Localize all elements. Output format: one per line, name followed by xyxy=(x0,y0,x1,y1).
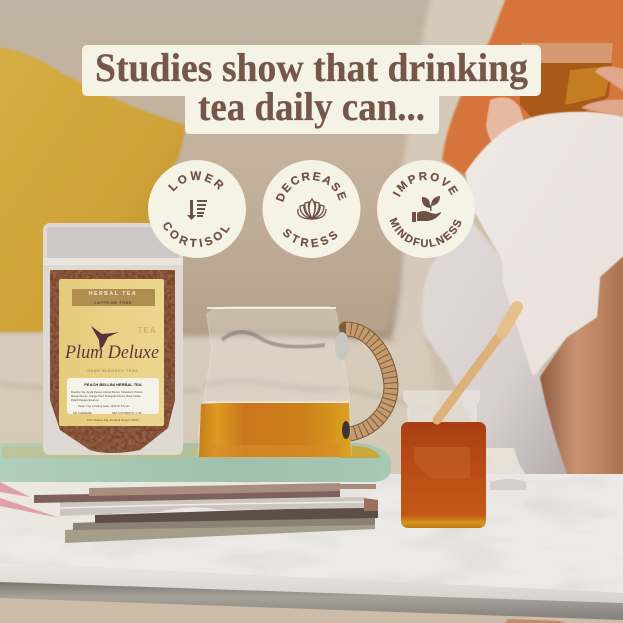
metal frame xyxy=(0,582,623,620)
line 1: Studies show that drinking xyxy=(95,45,528,90)
badge text: LOWER xyxy=(168,171,224,192)
address: Plum Deluxe Tea, Portland Oregon 97204 xyxy=(87,418,139,422)
knee and linen skirt xyxy=(465,112,623,377)
ingredients: Steep 1 tsp in boiling water, 212F for 5-6 min xyxy=(78,404,130,408)
ingredients: Rooibos Tea, Apple Pieces, Apricot Pieces, Strawberry Pieces, xyxy=(71,390,143,394)
badge: decrease stress: STRESS xyxy=(283,229,338,248)
yellow throw pillow xyxy=(0,46,185,332)
page surfaces xyxy=(0,475,364,543)
band xyxy=(72,289,155,306)
wicker handle xyxy=(346,329,391,434)
band text: HERBAL TEA xyxy=(89,291,137,297)
pouch body xyxy=(43,223,183,455)
table top xyxy=(0,474,623,593)
hand right xyxy=(581,66,623,118)
magazine 4 spine xyxy=(95,506,378,523)
net contents: NO CAFFEINE xyxy=(73,411,92,415)
lower skirt xyxy=(422,213,572,477)
brand: Plum Deluxe xyxy=(64,342,159,363)
TEA stamp: TEA xyxy=(138,326,156,335)
icon: down arrow with lines xyxy=(187,200,207,220)
icon: hand with seedling xyxy=(412,196,441,222)
magazine 5 spine xyxy=(73,512,375,530)
wooden dipper xyxy=(437,307,517,420)
marble table xyxy=(0,474,623,620)
stack of magazines xyxy=(0,475,378,543)
tea glass xyxy=(520,43,613,124)
badge: improve mindfulness xyxy=(377,160,475,258)
headline xyxy=(82,45,541,134)
hummingbird xyxy=(91,326,119,350)
ingredients: Peach Papaya Essence xyxy=(71,398,99,402)
glass body xyxy=(199,307,351,455)
foot below table xyxy=(505,619,565,623)
magazine 2 spine xyxy=(34,490,340,503)
net contents: NET CONTENTS: 1 OZ xyxy=(112,411,142,415)
tea pouch xyxy=(43,223,183,455)
tea pouch: CAFFEINE FREE xyxy=(94,301,132,305)
magazine 6 spine xyxy=(65,518,375,543)
badge: improve mindfulness: MINDFULNESS xyxy=(390,217,462,248)
badge text: DECREASE xyxy=(276,172,347,202)
badge: lower cortisol xyxy=(148,160,246,258)
person in orange sweater and linen skirt xyxy=(422,0,623,623)
tagline: HAND BLENDED TEAS xyxy=(87,369,139,373)
glass jug with tea xyxy=(199,307,391,457)
orange sweater xyxy=(442,0,623,178)
honey xyxy=(401,422,486,528)
magazine 1 spine xyxy=(89,483,340,496)
badge: decrease stress xyxy=(262,160,360,258)
magazine 3 spine xyxy=(60,497,364,516)
product name: PEACH BELLINI HERBAL TEA xyxy=(84,382,142,387)
jar neck xyxy=(404,391,479,424)
label xyxy=(59,279,164,426)
honey jar xyxy=(401,307,517,528)
icon: lotus xyxy=(298,199,326,219)
small glass lid xyxy=(486,448,528,516)
tea liquid xyxy=(199,402,351,457)
info box xyxy=(67,378,159,414)
ingredients: Mango Pieces, Orange Peel, Pineapple Pieces, Rose Petals, xyxy=(71,394,141,398)
badge text: IMPROVE xyxy=(392,172,458,197)
leg xyxy=(540,250,623,477)
table front edge xyxy=(0,563,623,604)
loose tea xyxy=(50,270,175,453)
banner xyxy=(82,45,541,134)
tray xyxy=(0,443,391,482)
badge: lower cortisol: CORTISOL xyxy=(164,222,230,247)
line 2: tea daily can... xyxy=(198,84,425,129)
hand left xyxy=(486,97,530,153)
handle joint xyxy=(335,332,349,360)
